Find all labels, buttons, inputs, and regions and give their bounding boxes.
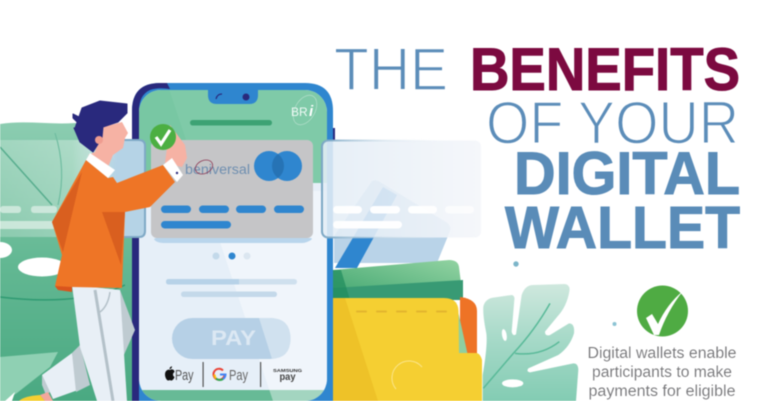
ankle <box>40 392 53 401</box>
hand <box>165 125 187 167</box>
lower back leg <box>42 353 78 399</box>
leaf hole <box>501 329 508 341</box>
wallet clasp arc <box>392 361 422 389</box>
samsung pay logo <box>273 368 302 383</box>
light green card <box>456 302 468 356</box>
leaf main vein <box>483 303 550 388</box>
title line: DIGITAL: DIGITAL <box>514 140 740 207</box>
check badge in hand <box>150 124 176 150</box>
google pay logo <box>214 368 249 384</box>
benefit text block: participants to make <box>592 364 732 381</box>
front leg <box>72 285 127 401</box>
back leg shadow <box>42 345 90 395</box>
wallet shade <box>333 298 378 401</box>
side button <box>333 128 335 140</box>
stitching <box>356 310 447 312</box>
right frosted pane <box>322 140 481 238</box>
text placeholder bars <box>166 279 297 297</box>
hair <box>73 101 127 152</box>
neck and face <box>88 122 128 167</box>
phone screen <box>139 83 327 401</box>
top bar <box>190 120 272 126</box>
sweater <box>52 160 175 291</box>
blue card behind right pane <box>334 180 450 268</box>
phone body <box>132 83 333 401</box>
title line: OF YOUR: OF YOUR <box>486 90 739 156</box>
sweater shadow left <box>52 172 82 252</box>
BRI logo: i <box>309 103 314 120</box>
divider <box>202 362 204 387</box>
shoe <box>19 395 45 401</box>
BRI logo: BR <box>291 105 308 119</box>
title line: THE BENEFITS: BENEFITS <box>470 36 740 103</box>
BRI logo <box>288 91 322 129</box>
speaker arc <box>216 94 222 99</box>
notch <box>208 90 258 104</box>
yellow wallet body <box>333 298 482 401</box>
benefit text block: Digital wallets enable <box>588 345 736 362</box>
left frosted pane <box>0 133 145 237</box>
pay button: PAY <box>211 327 256 350</box>
background leaf: right monstera <box>483 284 578 401</box>
decorative dot <box>612 322 616 326</box>
brand swoosh <box>193 157 215 177</box>
title <box>334 36 740 261</box>
title line: WALLET: WALLET <box>505 195 740 261</box>
background leaf: left monstera <box>0 122 132 401</box>
samsung pay logo: pay <box>280 372 296 383</box>
card brand text: beniversal <box>185 162 250 177</box>
cuff <box>163 158 183 182</box>
green card band <box>333 280 463 300</box>
pant seam <box>95 290 113 401</box>
benefit text block: payments for eligible <box>588 383 736 400</box>
ear <box>95 136 103 144</box>
lower light leaf <box>0 352 58 401</box>
wallet <box>333 260 482 401</box>
samsung pay logo: SAMSUNG <box>273 368 302 374</box>
apple pay logo <box>165 366 194 384</box>
payment card <box>151 140 313 238</box>
icon: green check badge <box>637 286 688 336</box>
leaf hole <box>502 379 523 387</box>
pocket <box>100 292 110 312</box>
decorative dot <box>513 261 519 267</box>
back leg gray <box>95 288 135 357</box>
blue strip under card <box>154 238 312 243</box>
pagination dots <box>212 252 250 260</box>
pay button <box>172 318 290 359</box>
phone navy edge <box>132 83 170 401</box>
apple pay logo: Pay <box>175 368 194 384</box>
leaf side vein <box>515 342 559 354</box>
person <box>5 101 187 401</box>
title line: THE BENEFITS <box>334 36 740 103</box>
title line: THE BENEFITS: THE <box>334 36 448 103</box>
shoe lace streak <box>5 392 15 401</box>
collar <box>86 153 115 178</box>
sweater shadow right <box>102 212 125 265</box>
pane dashes <box>333 206 474 228</box>
google pay logo: Pay <box>229 368 249 384</box>
sweater hem <box>55 286 72 292</box>
card circles <box>254 151 302 181</box>
card number dashes <box>161 206 304 228</box>
green card <box>333 260 463 300</box>
leaf veins behind pane <box>0 147 52 205</box>
camera <box>242 94 250 100</box>
faded pane dashes <box>0 206 57 229</box>
orange card <box>460 297 477 356</box>
smartphone <box>132 83 335 401</box>
benefit text block <box>588 345 736 400</box>
divider <box>260 362 261 387</box>
